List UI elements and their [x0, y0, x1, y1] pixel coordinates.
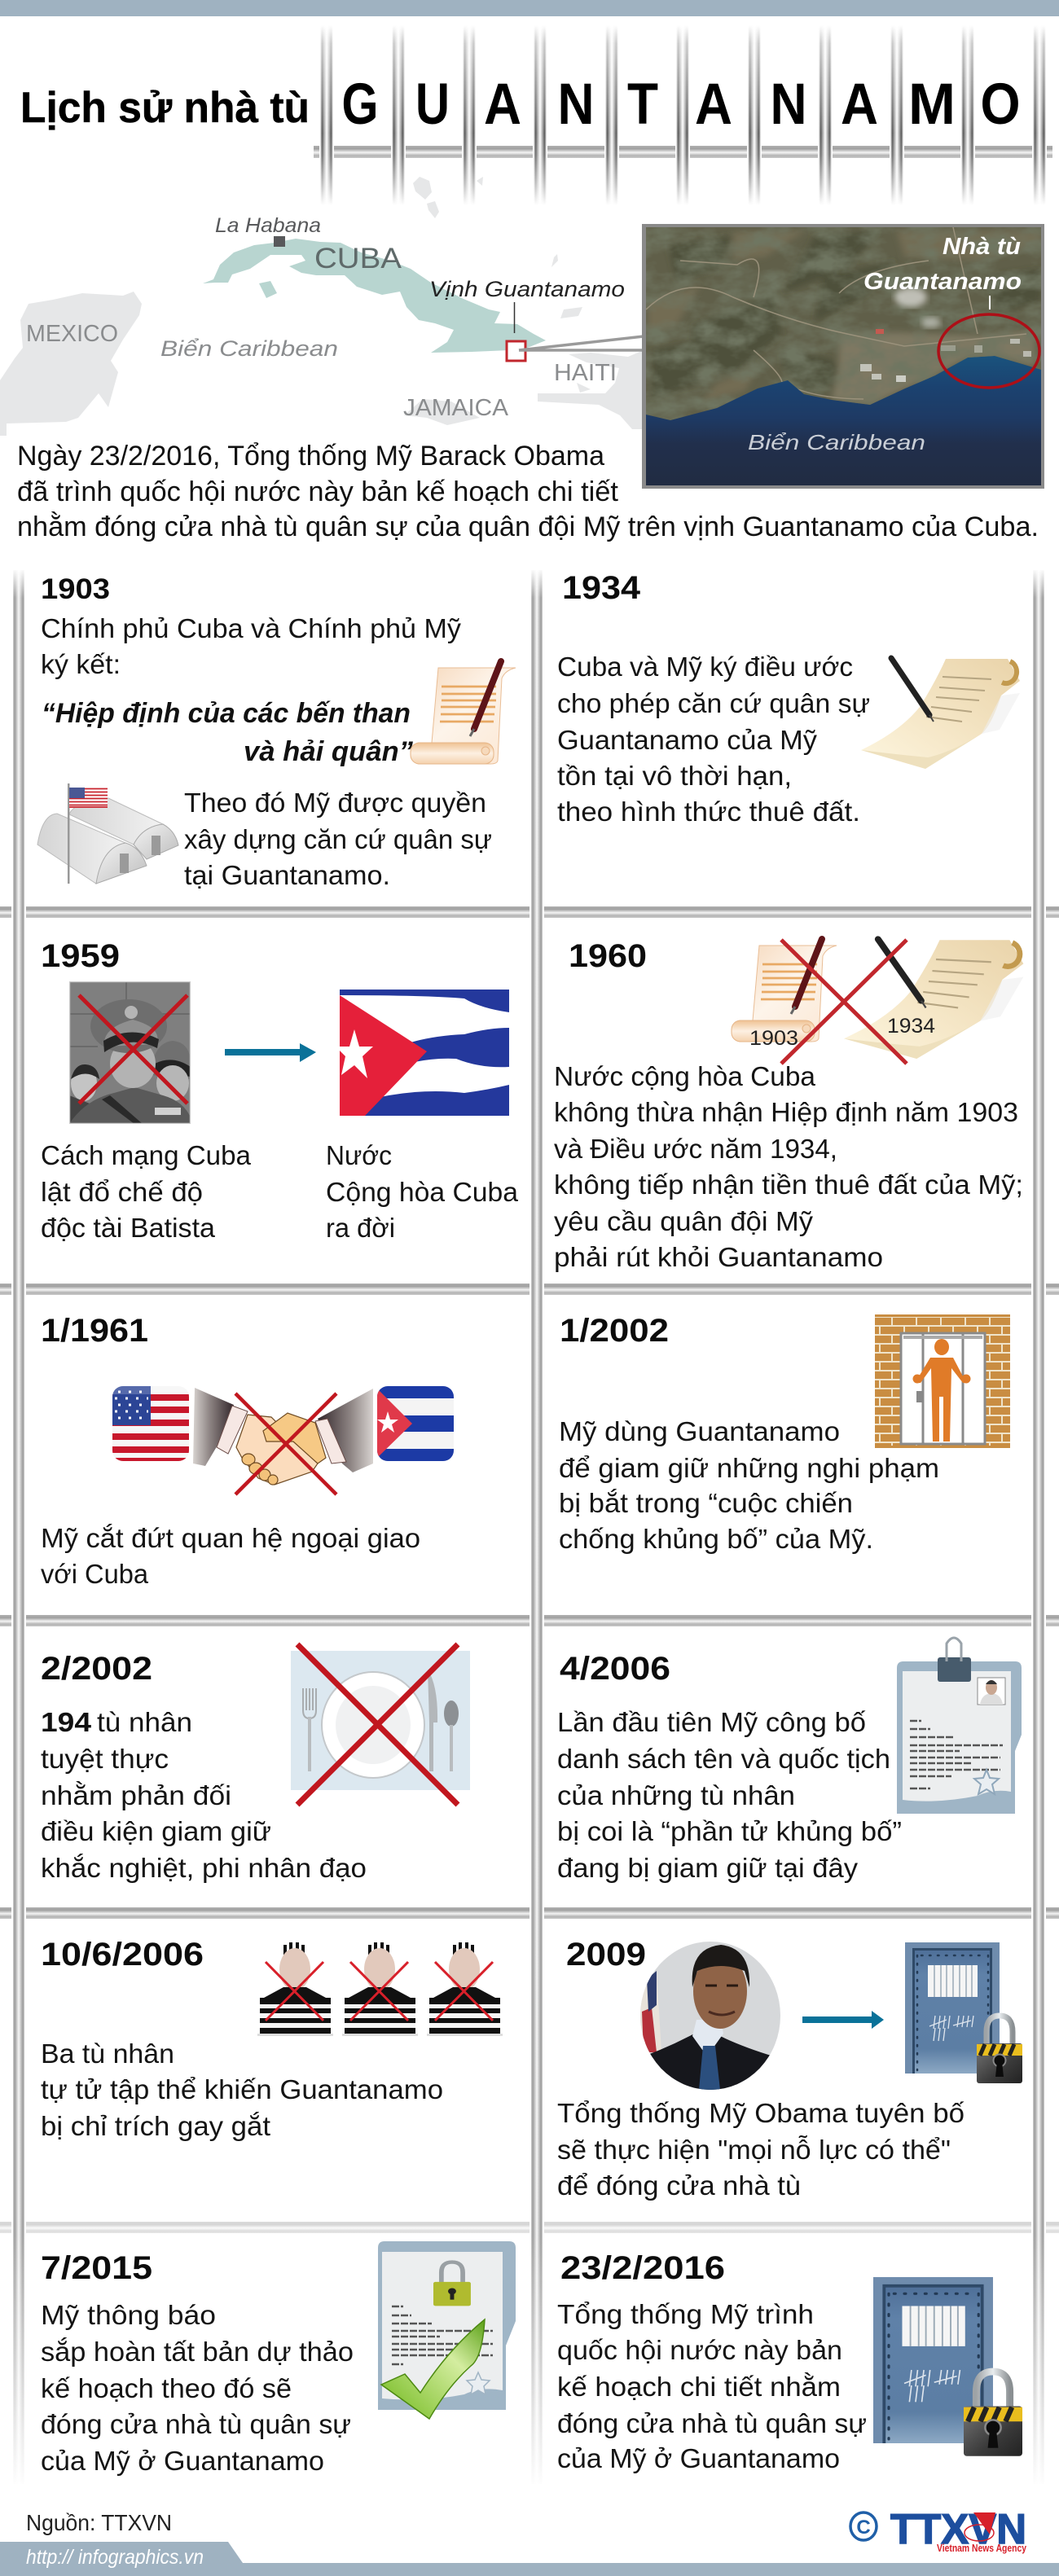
- title: GUANTANAMO: A: [484, 72, 521, 137]
- land: Jamaica: [404, 399, 480, 425]
- title: GUANTANAMO: [342, 72, 1020, 137]
- panel: 1903: [37, 573, 516, 890]
- text: không thừa nhận Hiệp định năm 1903: [554, 1097, 1018, 1127]
- text: chống khủng bố” của Mỹ.: [559, 1524, 873, 1554]
- text: và Điều ước năm 1934,: [554, 1134, 837, 1164]
- text: bị coi là “phần tử khủng bố”: [557, 1816, 902, 1846]
- panel: 7/2015: [41, 2241, 516, 2476]
- label: CUBA: CUBA: [314, 243, 402, 274]
- text: [557, 652, 870, 827]
- icon: prison door: [905, 1942, 1000, 2074]
- text: treaty signing: ký kết:: [41, 649, 121, 679]
- title: GUANTANAMO: O: [981, 72, 1020, 137]
- text: republic: ra đời: [326, 1213, 395, 1243]
- land: Hispaniola: [538, 350, 644, 429]
- leader lines to satellite: [519, 336, 644, 350]
- arrow: [225, 1043, 316, 1062]
- text: treaty signing: Chính phủ Cuba và Chính phủ Mỹ: [41, 613, 462, 643]
- label: HAITI: HAITI: [554, 360, 617, 386]
- text: sẽ thực hiện "mọi nỗ lực có thể": [557, 2135, 951, 2165]
- timeline grid bars: [0, 568, 1059, 2488]
- text: Mỹ dùng Guantanamo: [559, 1416, 840, 1446]
- icon: document with approval check: [378, 2241, 516, 2419]
- title: GUANTANAMO: N: [557, 72, 595, 137]
- text: bị bắt trong “cuộc chiến: [559, 1488, 853, 1518]
- top band: [0, 0, 1059, 16]
- intro text: nhằm đóng cửa nhà tù quân sự của quân đội Mỹ trên vịnh Guantanamo của Cuba.: [17, 511, 1039, 542]
- label: JAMAICA: JAMAICA: [403, 395, 509, 421]
- panel: 10/6/2006: [41, 1937, 503, 2141]
- panel: 1934: [557, 570, 1020, 827]
- text: tuyệt thực: [41, 1744, 169, 1774]
- text: điều kiện giam giữ: [41, 1816, 271, 1846]
- land: Cuba: [203, 239, 546, 353]
- label: Biển Caribbean: Biển Caribbean: [748, 430, 925, 454]
- text: Lần đầu tiên Mỹ công bố: [557, 1707, 866, 1737]
- year: 7/2015: [41, 2250, 152, 2286]
- text: [557, 2098, 965, 2201]
- text: của Mỹ ở Guantanamo: [557, 2443, 840, 2473]
- icon: prisoner in cell: [875, 1314, 1010, 1448]
- land: [646, 227, 1041, 420]
- title: GUANTANAMO: N: [771, 72, 806, 137]
- roads: [646, 227, 1026, 399]
- icon: three prisoners crossed out: [257, 1942, 503, 2036]
- text: base rights: tại Guantanamo.: [184, 860, 390, 890]
- icon: flag of Cuba: [377, 1386, 454, 1461]
- icon: flag of USA: [112, 1386, 189, 1461]
- text: Mỹ thông báo: [41, 2300, 216, 2330]
- panel: 1960: [554, 938, 1023, 1272]
- label: La Habana: La Habana: [215, 214, 321, 237]
- text: Guantanamo của Mỹ: [557, 725, 818, 755]
- icon: voided documents: 1903: [749, 1027, 798, 1050]
- title: Lịch sử nhà tù: Lịch sử nhà tù: [20, 84, 310, 132]
- URL: http:// infographics.vn: [26, 2546, 204, 2569]
- year: 1/2002: [560, 1313, 669, 1349]
- year: 10/6/2006: [41, 1937, 204, 1973]
- text: Nước cộng hòa Cuba: [554, 1061, 816, 1091]
- text: [41, 1523, 420, 1589]
- text: của những tù nhân: [557, 1780, 795, 1810]
- text: không tiếp nhận tiền thuê đất của Mỹ;: [554, 1170, 1023, 1200]
- prison bars behind title: [314, 25, 1052, 205]
- year: 1934: [562, 570, 641, 606]
- panel: 2009: [557, 1937, 1022, 2201]
- text: của Mỹ ở Guantanamo: [41, 2446, 324, 2476]
- map of the Caribbean: [0, 177, 644, 436]
- land: Isle of Youth: [259, 281, 277, 298]
- cloud: [894, 287, 927, 307]
- text: [554, 1061, 1023, 1272]
- photo: Batista crossed out: [69, 981, 191, 1124]
- text: treaty name: “Hiệp định của các bến than: [42, 698, 411, 729]
- text: nhằm phản đối: [41, 1780, 231, 1810]
- text: treaty signing: [41, 613, 462, 679]
- text: Tổng thống Mỹ trình: [557, 2299, 814, 2329]
- text: kế hoạch theo đó sẽ: [41, 2373, 292, 2403]
- icon: voided documents: [732, 939, 1023, 1064]
- text: base rights: Theo đó Mỹ được quyền: [184, 788, 486, 818]
- text: Tổng thống Mỹ Obama tuyên bố: [557, 2098, 965, 2128]
- label: Vịnh Guantanamo: Vịnh Guantanamo: [429, 277, 625, 301]
- text: [41, 2038, 443, 2141]
- text: [557, 1707, 902, 1883]
- terrain shading: [646, 227, 1041, 423]
- locator box: [507, 341, 525, 361]
- title: GUANTANAMO: A: [841, 72, 878, 137]
- source note: Nguồn: TTXVN: [26, 2510, 172, 2535]
- text: tồn tại vô thời hạn,: [557, 761, 792, 791]
- panel: 1959: [41, 938, 519, 1243]
- footer band with URL: [0, 2542, 1059, 2576]
- title: GUANTANAMO: M: [908, 72, 956, 137]
- year: 2009: [566, 1937, 646, 1973]
- text: Ba tù nhân: [41, 2038, 174, 2069]
- text: đóng cửa nhà tù quân sự: [41, 2409, 351, 2439]
- icon: military huts with flag: [37, 783, 178, 884]
- logo: TTXVN: TTXVN: [890, 2506, 1026, 2553]
- text: republic: Nước: [326, 1140, 392, 1170]
- text: [559, 1416, 939, 1554]
- text: republic: Cộng hòa Cuba: [326, 1177, 519, 1207]
- text: theo hình thức thuê đất.: [557, 796, 860, 827]
- icon: padlock: [977, 2016, 1022, 2083]
- arrow: [802, 2011, 884, 2029]
- text: Mỹ cắt đứt quan hệ ngoại giao: [41, 1523, 420, 1553]
- text: khắc nghiệt, phi nhân đạo: [41, 1853, 367, 1883]
- text: [557, 2299, 867, 2473]
- icon: plate crossed out: [291, 1644, 470, 1805]
- intro text: [17, 441, 1039, 542]
- panel: 4/2006: [557, 1638, 1022, 1883]
- icon: voided documents: 1934: [887, 1015, 935, 1038]
- icon: prison door: [873, 2277, 993, 2443]
- land: Mexico: [0, 292, 142, 436]
- flag of Cuba: [340, 990, 509, 1116]
- title: GUANTANAMO: A: [695, 72, 732, 137]
- label: MEXICO: MEXICO: [26, 321, 118, 347]
- logo: TTXVN: Vietnam News Agency: [937, 2542, 1027, 2554]
- text: quốc hội nước này bản: [557, 2335, 842, 2365]
- buildings: [860, 339, 1031, 382]
- text: revolution: lật đổ chế độ: [41, 1177, 203, 1207]
- text: revolution: [41, 1140, 252, 1243]
- text: treaty name: [42, 698, 413, 767]
- icon: padlock: [964, 2372, 1022, 2456]
- year: 1/1961: [41, 1313, 148, 1349]
- logo: TTXVN: C: [856, 2517, 871, 2539]
- year: 1959: [41, 938, 120, 974]
- text: bị chỉ trích gay gắt: [41, 2111, 270, 2141]
- year: 1903: [41, 573, 110, 605]
- highlighted circle: [938, 314, 1039, 388]
- title: GUANTANAMO: U: [415, 72, 450, 137]
- marker: La Habana: [274, 236, 285, 247]
- label: Guantanamo: Guantanamo: [863, 269, 1022, 295]
- icon: scroll and pen: [411, 661, 516, 764]
- text: phải rút khỏi Guantanamo: [554, 1242, 883, 1272]
- intro text: Ngày 23/2/2016, Tổng thống Mỹ Barack Obama: [17, 441, 604, 472]
- text: tự tử tập thể khiến Guantanamo: [41, 2074, 443, 2104]
- text: base rights: xây dựng căn cứ quân sự: [184, 824, 492, 854]
- text: với Cuba: [41, 1559, 149, 1589]
- red cross: [79, 995, 187, 1104]
- text: treaty name: và hải quân”: [244, 736, 413, 767]
- panel: 1/2002: [559, 1313, 1010, 1554]
- text: revolution: độc tài Batista: [41, 1213, 216, 1243]
- text: tù nhân: [97, 1707, 192, 1737]
- text: đang bị giam giữ tại đây: [557, 1853, 859, 1883]
- panel: 1/1961: [41, 1313, 454, 1589]
- label: Biển Caribbean: Biển Caribbean: [160, 336, 338, 361]
- text: [41, 2300, 354, 2476]
- land: Bahamas and neighbouring islands: [413, 177, 582, 318]
- title: GUANTANAMO: T: [627, 72, 658, 137]
- text: danh sách tên và quốc tịch: [557, 1744, 890, 1774]
- text: base rights: [184, 788, 492, 890]
- text: 194: [41, 1707, 92, 1737]
- text: đóng cửa nhà tù quân sự: [557, 2408, 867, 2438]
- satellite image panel: [642, 224, 1044, 489]
- pointer line: [989, 296, 991, 309]
- icon: paper and pen: [861, 658, 1020, 769]
- year: 23/2/2016: [560, 2250, 725, 2286]
- photo: Obama: [640, 1941, 780, 2091]
- text: kế hoạch chi tiết nhằm: [557, 2372, 841, 2402]
- text: sắp hoàn tất bản dự thảo: [41, 2337, 354, 2367]
- icon: broken handshake: [193, 1388, 373, 1494]
- label: Nhà tù: Nhà tù: [943, 234, 1021, 260]
- text: republic: [326, 1140, 519, 1243]
- year: 1960: [569, 938, 647, 974]
- base area: [832, 330, 1035, 405]
- icon: clipboard with file: [897, 1638, 1022, 1814]
- text: revolution: Cách mạng Cuba: [41, 1140, 252, 1170]
- title: GUANTANAMO: G: [342, 72, 378, 137]
- panel: 23/2/2016: [557, 2250, 1022, 2473]
- year: 2/2002: [41, 1651, 152, 1687]
- text: [41, 1707, 367, 1883]
- intro text: đã trình quốc hội nước này bản kế hoạch chi tiết: [17, 476, 619, 507]
- year: 4/2006: [560, 1651, 670, 1687]
- text: cho phép căn cứ quân sự: [557, 688, 870, 718]
- text: để đóng cửa nhà tù: [557, 2170, 801, 2201]
- text: để giam giữ những nghi phạm: [559, 1453, 939, 1483]
- panel: 2/2002: [41, 1644, 470, 1883]
- text: yêu cầu quân đội Mỹ: [554, 1206, 814, 1236]
- text: Cuba và Mỹ ký điều ước: [557, 652, 853, 682]
- pointer line: [513, 302, 515, 333]
